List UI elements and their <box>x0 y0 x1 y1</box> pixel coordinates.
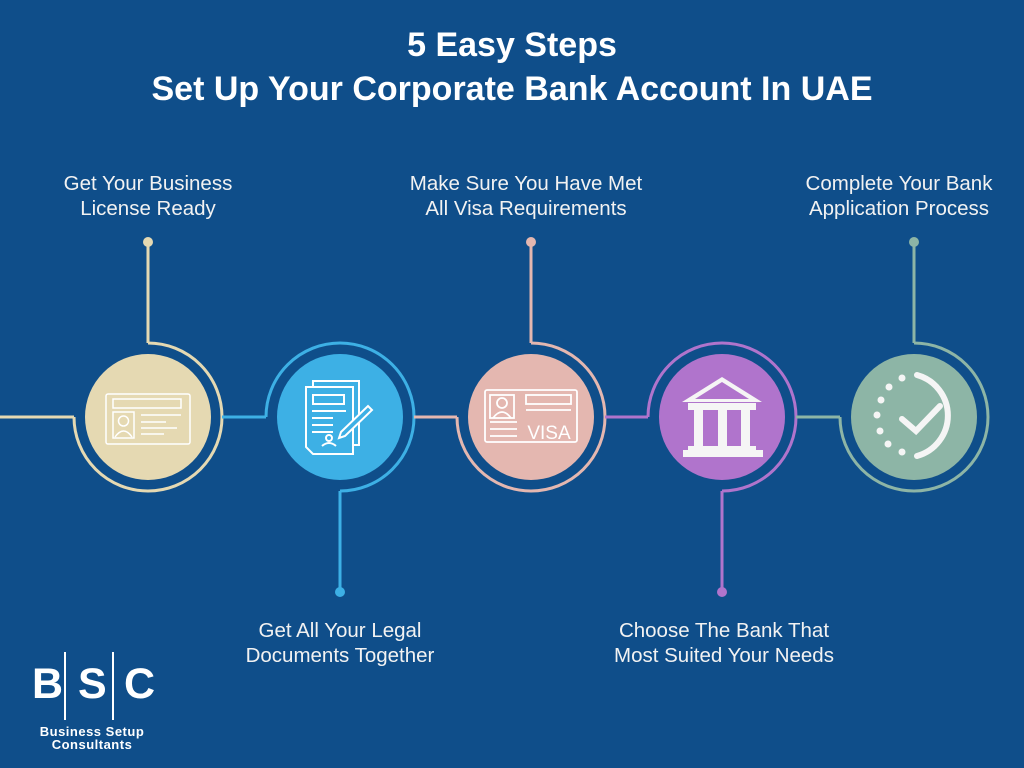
label: step 1: Get Your Business <box>64 172 232 195</box>
label: step 1: License Ready <box>80 197 216 220</box>
icon: documents with pen <box>306 381 372 454</box>
step 2 node <box>266 343 414 597</box>
logo: Consultants <box>52 737 132 752</box>
label: step 5: Complete Your Bank <box>806 172 992 195</box>
logo: C <box>124 660 155 708</box>
step 3 node: VISA <box>527 423 571 444</box>
icon: bank <box>682 377 763 457</box>
logo <box>32 652 155 752</box>
logo: S <box>78 660 107 708</box>
icon: visa card <box>485 390 577 442</box>
icon: check progress <box>902 375 948 456</box>
label: step 5 <box>806 172 992 220</box>
label: step 4: Most Suited Your Needs <box>614 644 834 667</box>
logo: Business Setup <box>40 724 144 739</box>
label: step 1 <box>64 172 232 220</box>
step 5 node <box>840 237 988 491</box>
label: step 2 <box>246 619 434 667</box>
title: Set Up Your Corporate Bank Account In UAE <box>151 70 872 108</box>
icon: id card <box>106 394 190 444</box>
label: step 5: Application Process <box>809 197 989 220</box>
step 4 node <box>648 343 796 597</box>
step 1 node <box>0 237 222 491</box>
logo: B <box>32 660 63 708</box>
title <box>151 26 872 108</box>
label: step 3: Make Sure You Have Met <box>410 172 642 195</box>
title: 5 Easy Steps <box>407 26 617 64</box>
label: step 3: All Visa Requirements <box>425 197 627 220</box>
label: step 4 <box>614 619 834 667</box>
label: step 4: Choose The Bank That <box>619 619 829 642</box>
label: step 2: Documents Together <box>246 644 434 667</box>
step 3 node <box>457 237 605 491</box>
label: step 2: Get All Your Legal <box>258 619 422 642</box>
label: step 3 <box>410 172 642 220</box>
step 4 node: BANK <box>710 391 734 400</box>
